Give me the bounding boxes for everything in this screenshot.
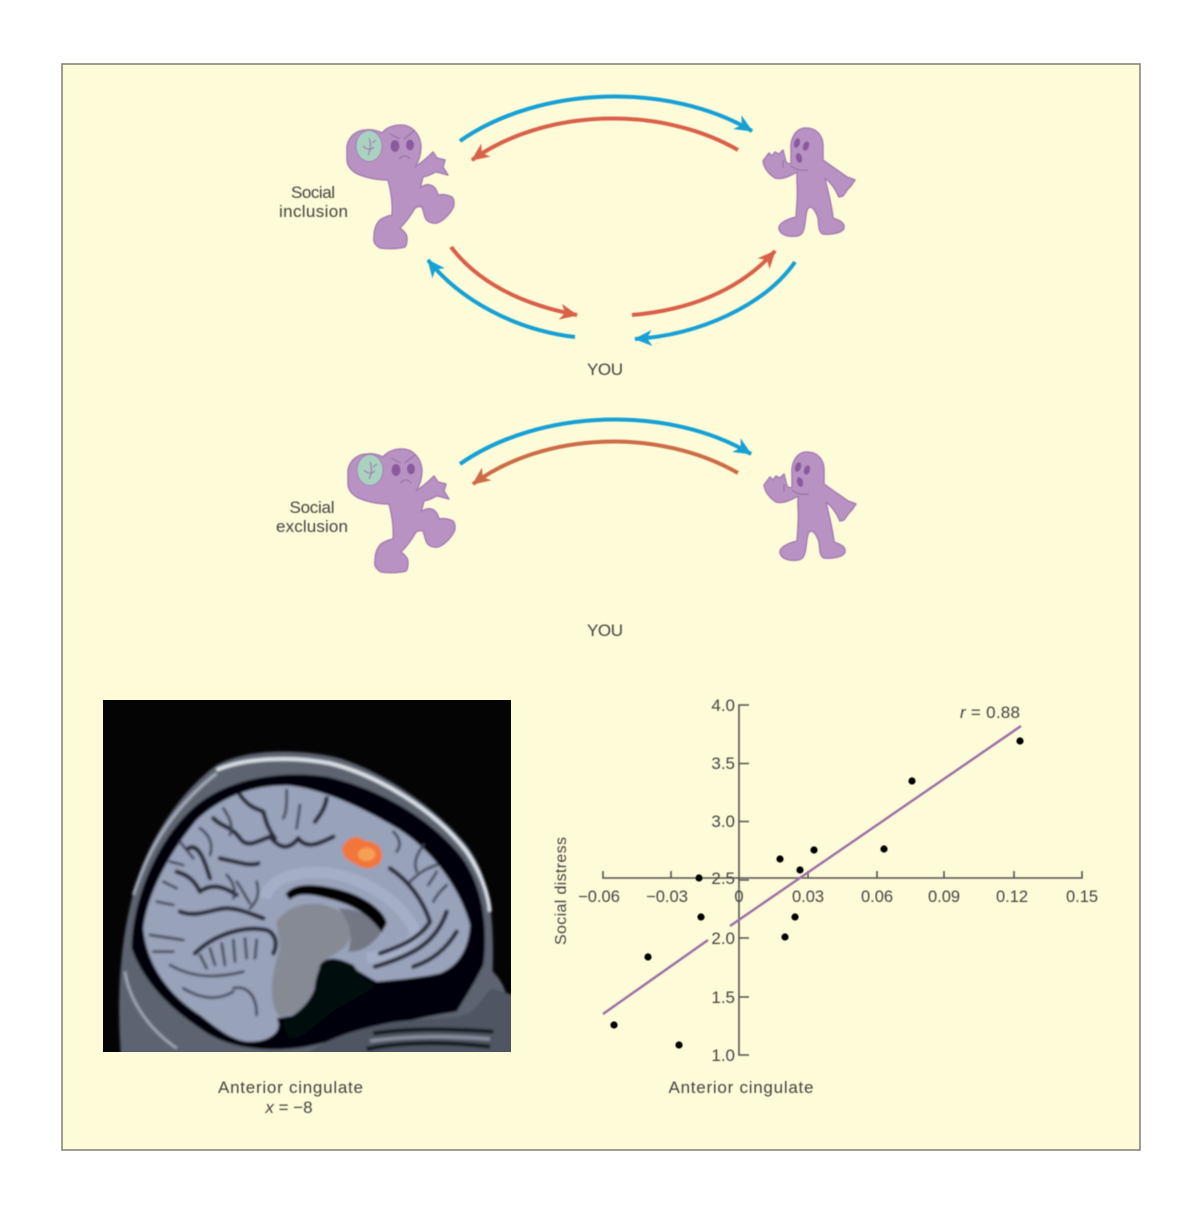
scatter chart <box>553 696 1098 1097</box>
icon: figure throwing ball <box>348 449 455 573</box>
x-axis tick labels: 0.09 <box>928 888 960 906</box>
arrow: blue lower left, from you <box>428 260 575 337</box>
label: inclusion: inclusion <box>279 202 348 221</box>
y-axis tick labels: 2.5 <box>711 869 735 888</box>
icon: figure receiving <box>763 128 855 236</box>
y-axis tick labels: 3.0 <box>711 812 735 831</box>
axes <box>603 705 1082 1055</box>
x-axis tick labels: 0 <box>734 888 744 906</box>
label: you: YOU <box>587 621 623 640</box>
lower face tissue <box>307 988 513 1053</box>
corpus callosum band <box>265 873 417 958</box>
black cavity <box>132 774 485 1049</box>
panel: social exclusion diagram <box>276 419 856 640</box>
scalp and skull <box>119 752 513 1053</box>
x-axis tick labels: 0.15 <box>1066 888 1098 906</box>
x-axis tick labels: 0.12 <box>996 888 1028 906</box>
label: social: Social <box>291 183 335 202</box>
y-axis tick labels: 3.5 <box>711 754 735 773</box>
arrow: blue, left to right <box>460 419 751 464</box>
brainstem and thalamus <box>272 904 351 1017</box>
y-axis tick labels: 1.0 <box>711 1046 735 1065</box>
x-axis tick labels: 0.03 <box>792 888 824 906</box>
regression line <box>603 726 1021 1014</box>
label: brain caption: x = −8 <box>264 1098 313 1117</box>
x-axis title: Anterior cingulate <box>668 1078 814 1097</box>
y-axis tick labels: 4.0 <box>711 696 735 715</box>
icon: figure throwing ball <box>347 125 454 249</box>
arrow: orange, right to left <box>473 442 738 484</box>
label: social: Social <box>290 498 334 517</box>
data points <box>610 737 1024 1049</box>
brain tissue <box>143 786 470 1042</box>
icon: figure receiving <box>764 452 856 560</box>
arrow: red top, right to left <box>472 118 738 160</box>
label: brain caption: Anterior cingulate <box>218 1078 363 1097</box>
base of brain shadow <box>282 959 377 1039</box>
label: brain caption <box>218 1078 363 1117</box>
activation hotspot <box>342 837 382 868</box>
arrow: red lower right, from you <box>632 251 775 315</box>
label: exclusion: exclusion <box>276 517 348 536</box>
y-axis tick labels <box>711 696 735 1065</box>
panel: brain scan <box>103 700 513 1053</box>
minor sulci <box>150 790 447 1015</box>
arrow: red lower left, to you <box>451 247 577 315</box>
x-axis tick labels <box>578 888 1098 906</box>
x-axis tick labels: −0.03 <box>646 888 688 906</box>
y-axis tick labels: 2.0 <box>711 929 735 948</box>
arrow: blue lower right, to you <box>635 262 795 339</box>
x-axis tick labels: −0.06 <box>578 888 620 906</box>
major sulci <box>177 795 457 967</box>
x-axis tick labels: 0.06 <box>861 888 893 906</box>
label: you: YOU <box>587 360 623 379</box>
correlation label: r = 0.88 <box>960 703 1020 722</box>
arrow: blue top, left to right <box>460 96 752 141</box>
ventricle <box>286 885 387 932</box>
panel: social inclusion diagram <box>279 96 855 379</box>
y-axis tick labels: 1.5 <box>711 988 735 1007</box>
y-axis title: Social distress <box>553 837 570 945</box>
